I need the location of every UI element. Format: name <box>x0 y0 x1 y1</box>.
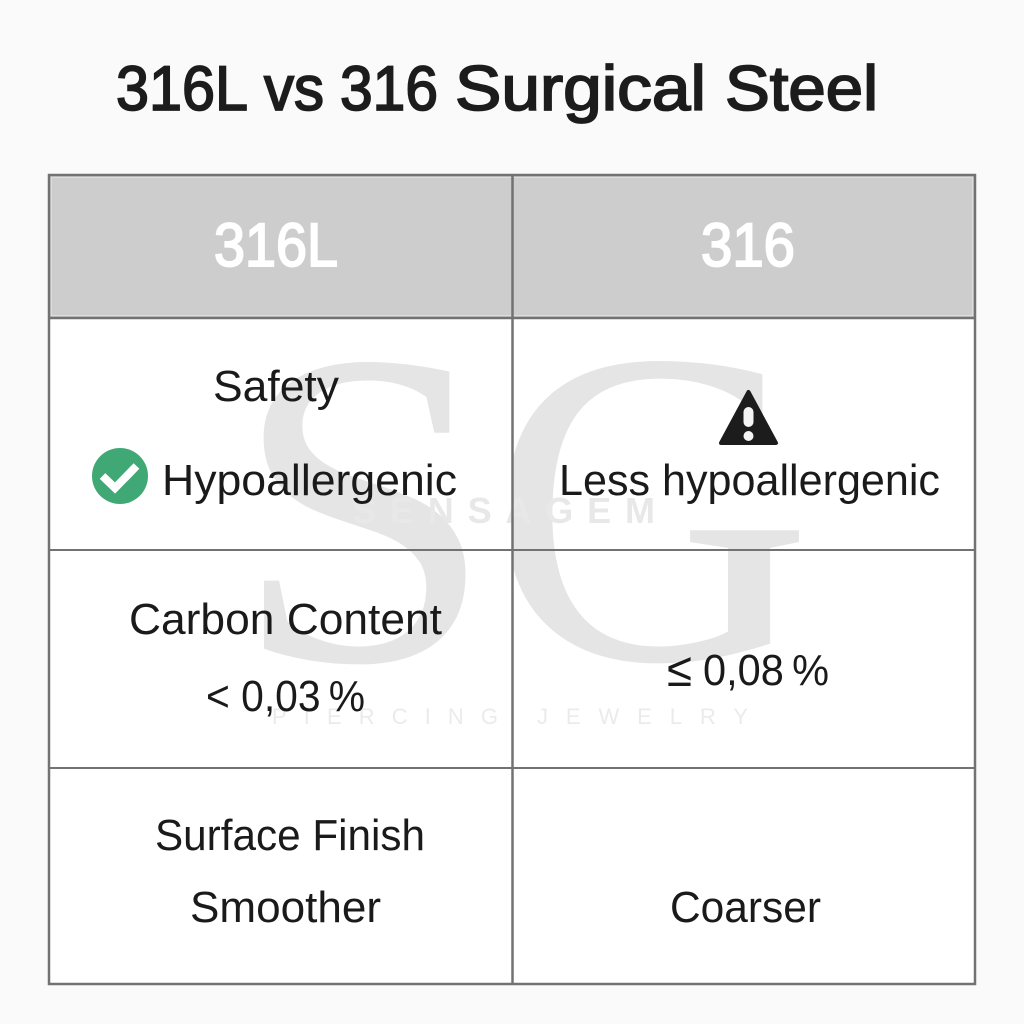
table body background <box>49 318 975 984</box>
text: Less hypoallergenic: Less hypoallergenic <box>559 456 940 505</box>
symbol: less than or equal: ≤ <box>667 644 692 697</box>
title <box>116 54 878 124</box>
icon: green check <box>92 448 148 504</box>
value: 316 carbon <box>667 644 829 697</box>
watermark: monogram G: G <box>488 259 813 757</box>
title word: 316L: 316L <box>116 54 248 124</box>
text: Hypoallergenic: Hypoallergenic <box>162 456 457 505</box>
title word: Steel: Steel <box>725 54 878 124</box>
watermark word: PIERCING: PIERCING <box>272 704 498 729</box>
table grid <box>49 175 975 984</box>
row: safety <box>92 362 940 505</box>
title word: 316: 316 <box>340 54 438 124</box>
label: Safety: Safety <box>213 362 339 411</box>
watermark: PIERCING JEWELRY <box>272 704 748 729</box>
watermark: SENSAGEM: SENSAGEM <box>352 490 655 531</box>
watermark logo <box>264 361 799 724</box>
number: 0,08 %: 0,08 % <box>703 646 829 695</box>
row: carbon content <box>129 595 829 721</box>
label: Carbon Content: Carbon Content <box>129 595 442 644</box>
watermark word: JEWELRY: JEWELRY <box>537 704 748 729</box>
icon: warning triangle <box>721 392 776 443</box>
header: 316L: 316L <box>214 211 338 279</box>
value: Coarser: Coarser <box>670 883 821 932</box>
header: 316: 316 <box>701 211 795 279</box>
title word: vs: vs <box>264 54 324 124</box>
watermark: monogram S: S <box>232 259 495 758</box>
value: 316L carbon: < 0,03 % <box>206 672 365 721</box>
row: surface finish <box>155 811 821 932</box>
header row <box>49 175 975 318</box>
value: Smoother: Smoother <box>190 883 381 932</box>
label: Surface Finish: Surface Finish <box>155 811 425 860</box>
title word: Surgical: Surgical <box>455 54 706 124</box>
